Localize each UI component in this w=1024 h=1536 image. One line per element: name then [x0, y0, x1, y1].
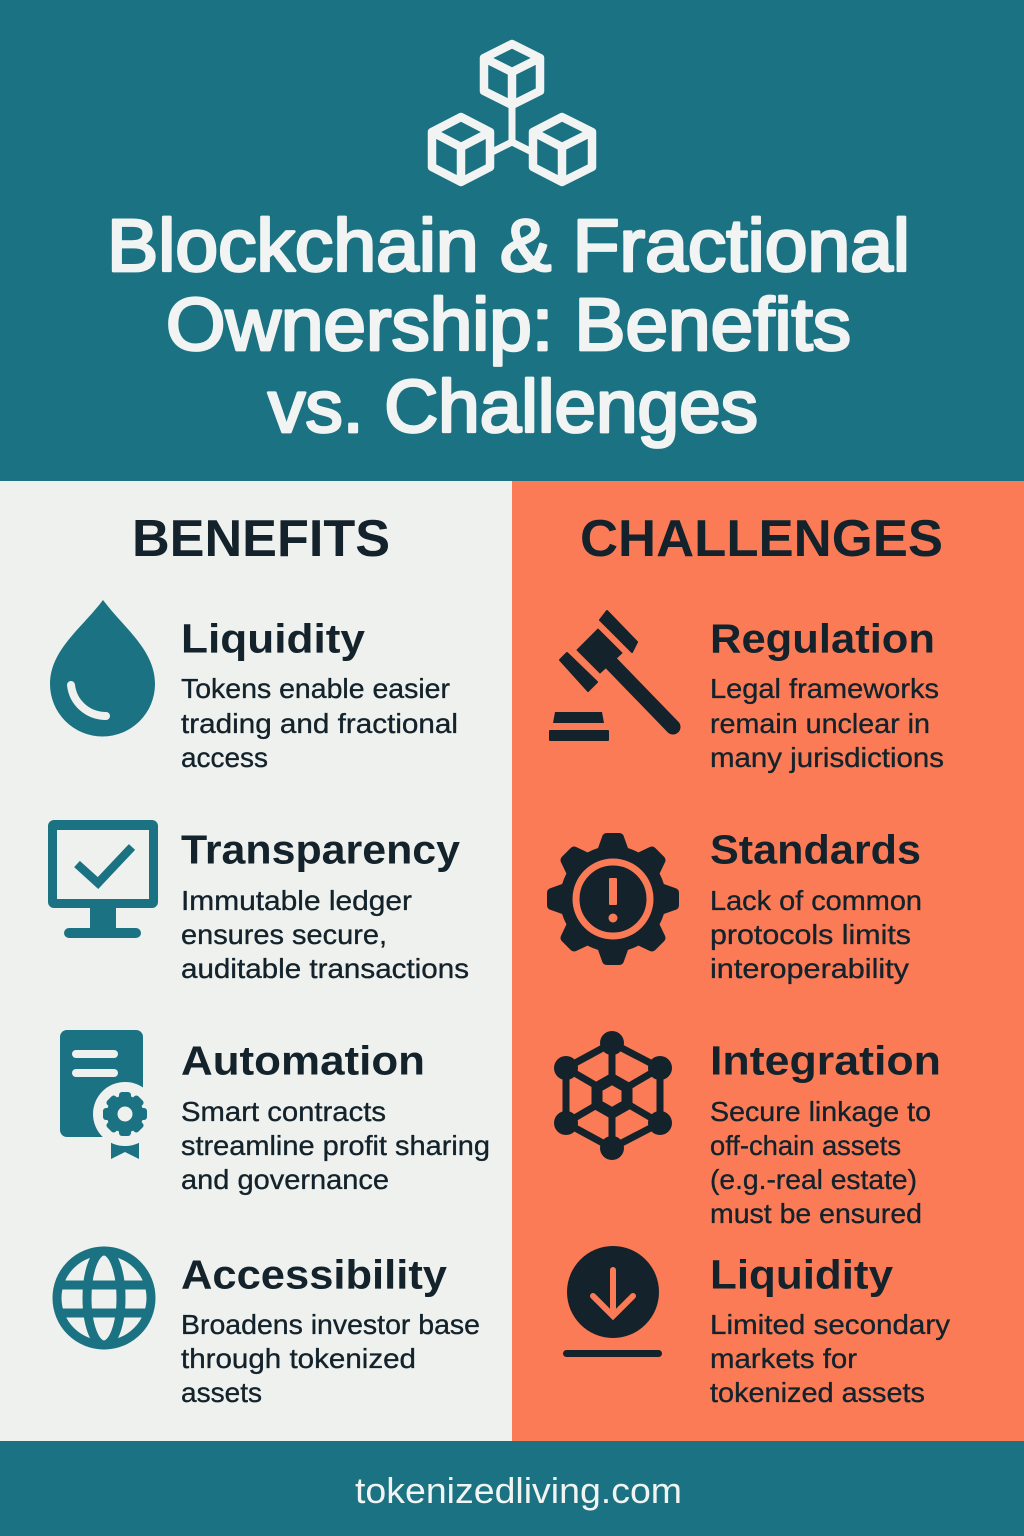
icon: smart contract document with gear: [60, 1030, 157, 1159]
challenge: integration: off-chain assets: [710, 1130, 901, 1161]
benefit: accessibility: [181, 1252, 480, 1408]
icon: globe: [57, 1251, 151, 1345]
benefit: accessibility: Accessibility: [181, 1252, 447, 1298]
benefit: liquidity: Tokens enable easier: [181, 673, 450, 704]
benefit: transparency: Immutable ledger: [181, 885, 412, 916]
benefit: liquidity: access: [181, 742, 268, 773]
panel: challenges: [547, 510, 950, 1408]
benefit: automation: streamline profit sharing: [181, 1130, 490, 1161]
footer website: tokenizedliving.com: [355, 1470, 682, 1511]
heading: benefits: BENEFITS: [132, 510, 390, 568]
icon: connected blockchain cubes: [432, 44, 592, 182]
challenge: standards: interoperability: [710, 953, 909, 984]
footer band: [0, 1441, 1024, 1536]
title: Blockchain & Fractional: [107, 204, 910, 287]
icon: gear with warning: [547, 833, 679, 965]
challenge: regulation: Regulation: [710, 616, 935, 662]
challenge: standards: Standards: [710, 826, 921, 872]
icon: gavel: [549, 611, 673, 741]
challenge: integration: Integration: [710, 1038, 941, 1084]
challenge: integration: [710, 1038, 941, 1229]
title: vs. Challenges: [268, 365, 758, 448]
icon: water drop: [50, 600, 155, 737]
icon: monitor with check: [48, 820, 158, 938]
benefit: liquidity: [181, 616, 458, 773]
challenge: liquidity: markets for: [710, 1343, 857, 1374]
challenges panel background: [512, 481, 1024, 1441]
benefit: accessibility: assets: [181, 1377, 262, 1408]
challenge: integration: must be ensured: [710, 1198, 922, 1229]
benefit: accessibility: through tokenized: [181, 1343, 416, 1374]
icon: integration network: [554, 1031, 672, 1160]
benefit: accessibility: Broadens investor base: [181, 1309, 480, 1340]
challenge: regulation: many jurisdictions: [710, 742, 944, 773]
challenge: standards: protocols limits: [710, 919, 911, 950]
challenge: regulation: remain unclear in: [710, 708, 930, 739]
benefit: transparency: ensures secure,: [181, 919, 387, 950]
challenge: integration: (e.g.-real estate): [710, 1164, 917, 1195]
benefit: automation: and governance: [181, 1164, 389, 1195]
header band: [0, 0, 1024, 481]
challenge: liquidity: [710, 1252, 950, 1408]
benefit: automation: Smart contracts: [181, 1096, 386, 1127]
challenge: regulation: [710, 616, 944, 773]
challenge: liquidity: Limited secondary: [710, 1309, 950, 1340]
benefit: automation: Automation: [181, 1038, 425, 1084]
benefit: transparency: Transparency: [181, 826, 460, 872]
benefit: transparency: [181, 826, 469, 984]
heading: challenges: CHALLENGES: [580, 510, 943, 568]
benefit: liquidity: Liquidity: [181, 616, 365, 662]
title: Ownership: Benefits: [166, 283, 851, 366]
challenge: standards: [710, 826, 922, 984]
challenge: liquidity: Liquidity: [710, 1252, 893, 1298]
challenge: integration: Secure linkage to: [710, 1096, 931, 1127]
challenge: liquidity: tokenized assets: [710, 1377, 925, 1408]
challenge: regulation: Legal frameworks: [710, 673, 939, 704]
benefits panel background: [0, 481, 512, 1441]
benefit: liquidity: trading and fractional: [181, 708, 458, 739]
benefit: transparency: auditable transactions: [181, 953, 469, 984]
panel: benefits: [48, 510, 490, 1408]
title: [107, 204, 910, 448]
challenge: standards: Lack of common: [710, 885, 922, 916]
icon: downward arrow in circle: [563, 1246, 662, 1357]
benefit: automation: [181, 1038, 490, 1195]
